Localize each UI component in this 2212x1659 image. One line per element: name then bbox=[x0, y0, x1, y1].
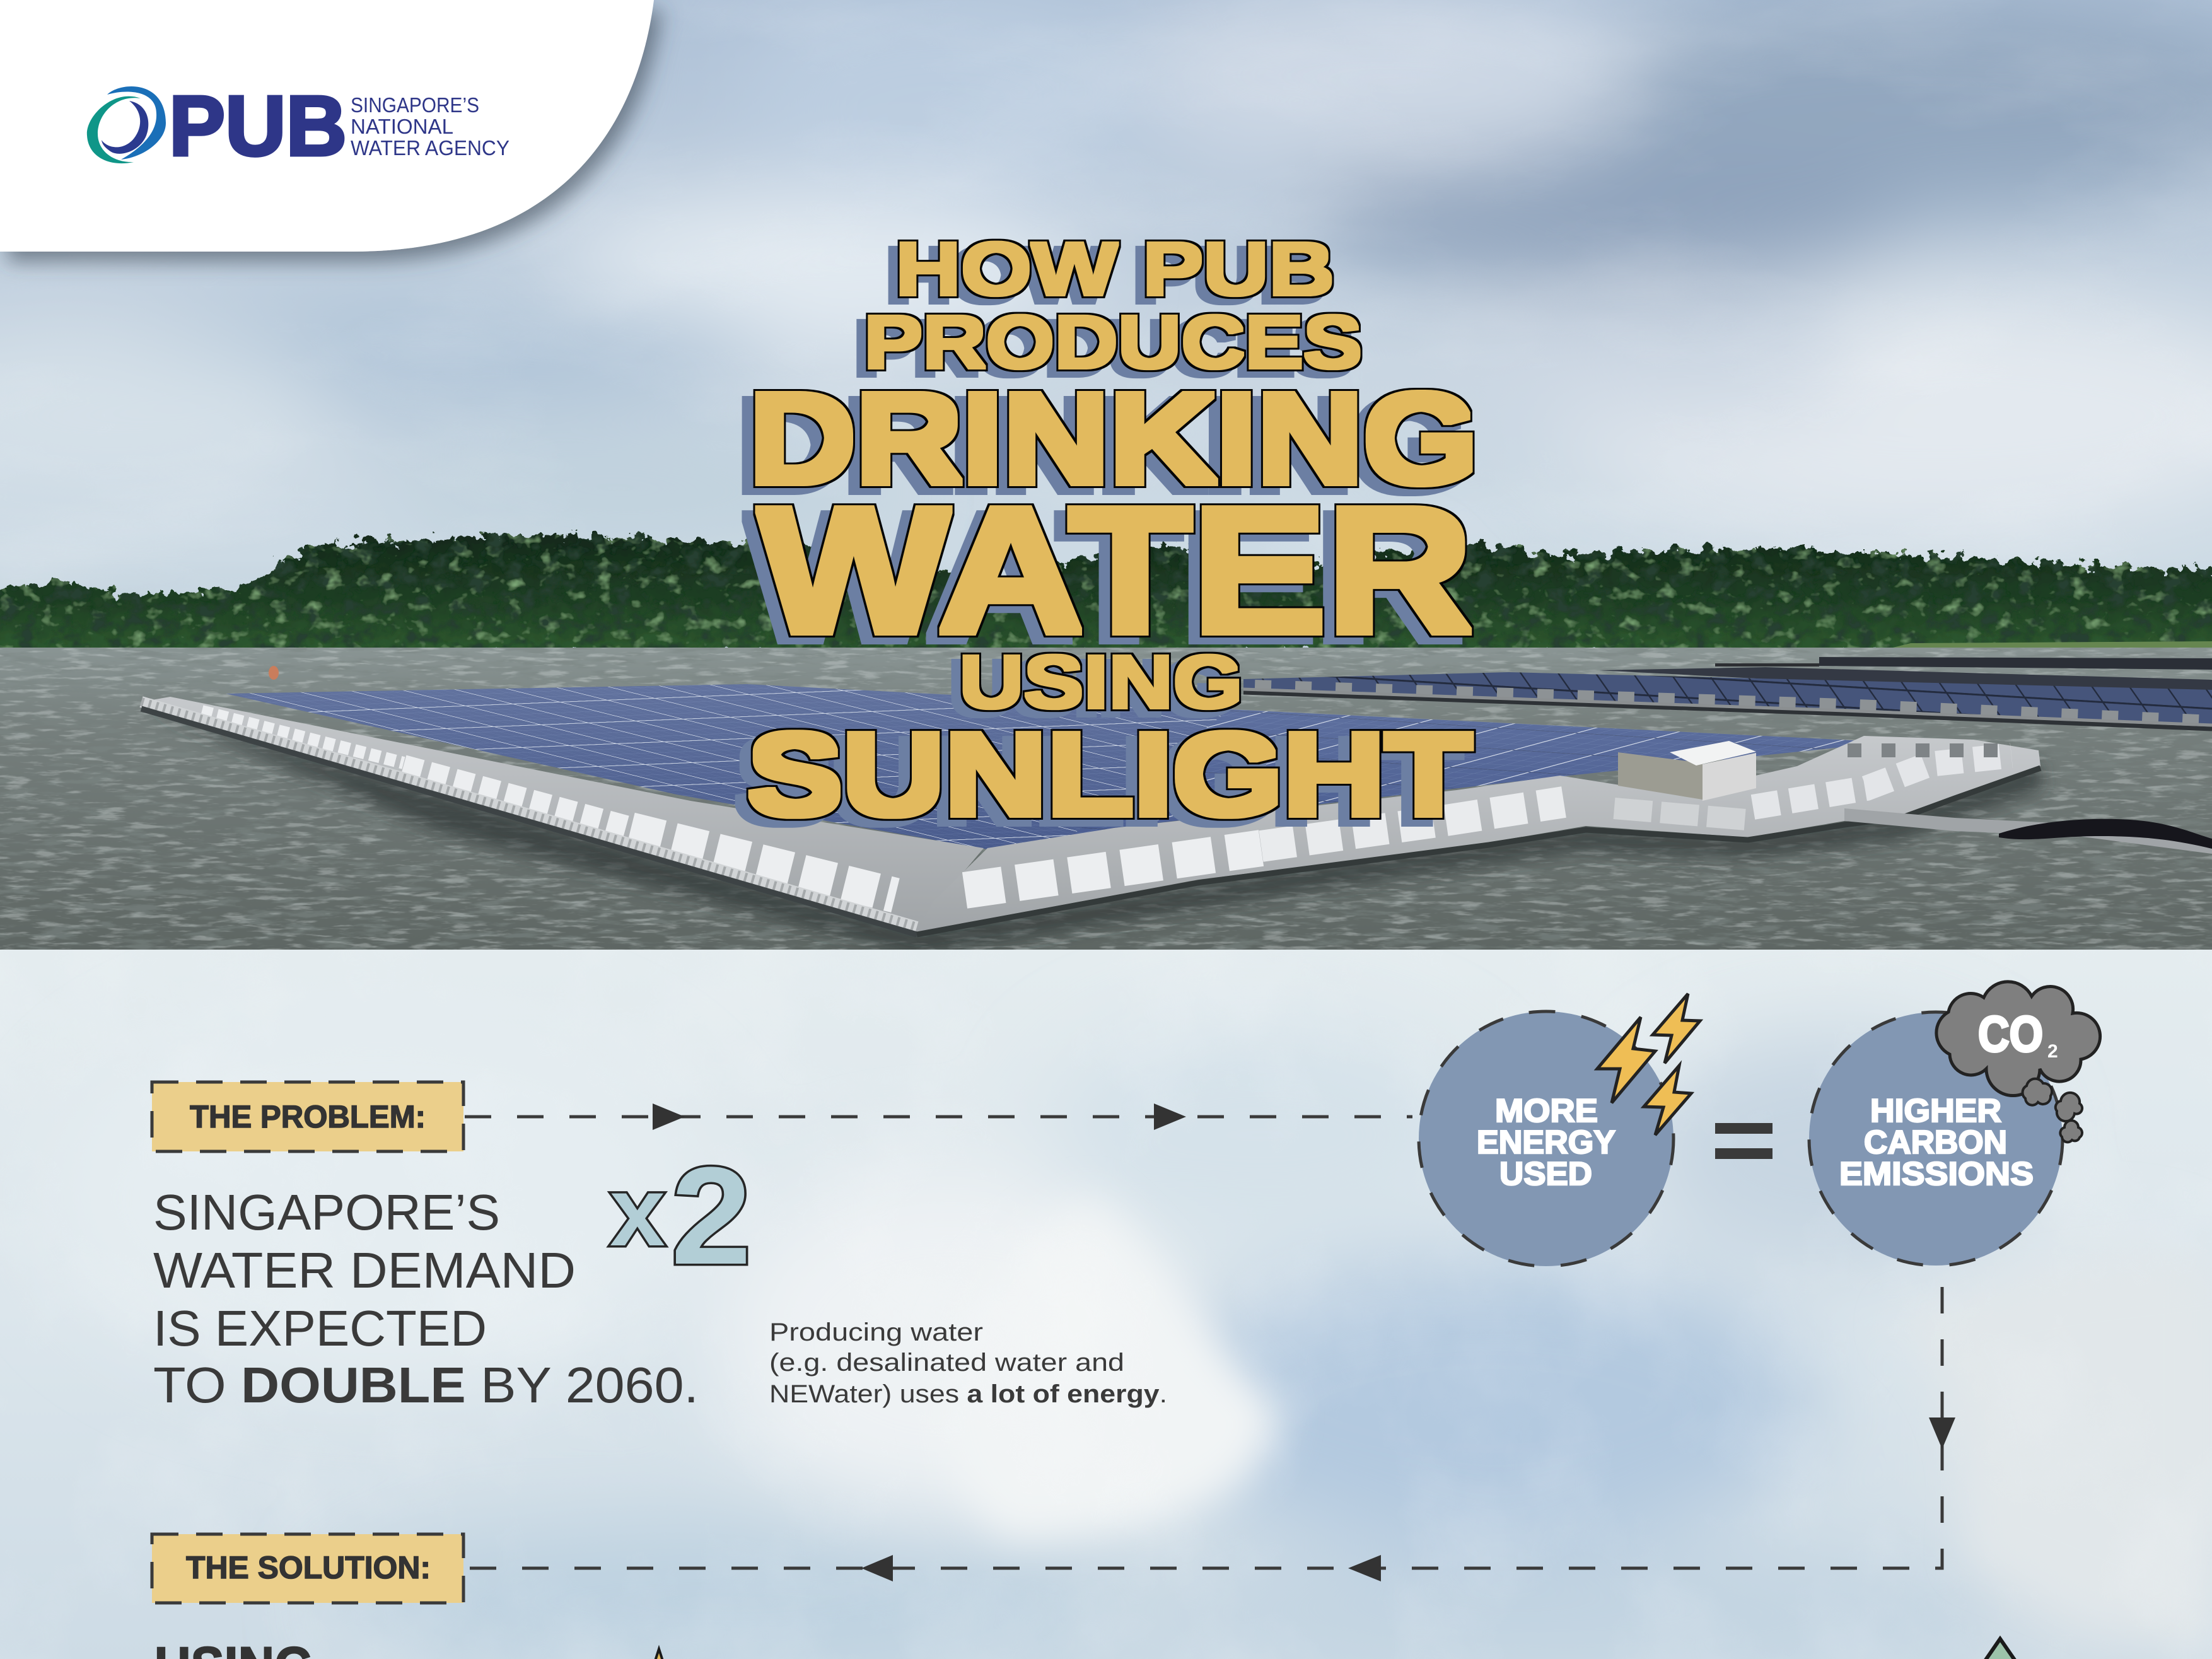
float frame: left edge walkway bbox=[141, 697, 984, 934]
circle: more energy used: USED bbox=[1499, 1156, 1592, 1192]
label: the problem: THE PROBLEM: bbox=[190, 1099, 426, 1134]
logo card bbox=[0, 0, 654, 252]
energy note text: NEWater) uses a lot of energy . bbox=[769, 1380, 1167, 1408]
energy note text: (e.g. desalinated water and bbox=[769, 1349, 1124, 1377]
flow connector: problem to energy circle bbox=[465, 1103, 1412, 1130]
electrical box bbox=[1618, 741, 1756, 801]
title: SUNLIGHT bbox=[748, 709, 1472, 839]
title: PRODUCES bbox=[864, 301, 1362, 384]
label: the solution: THE SOLUTION: bbox=[186, 1550, 431, 1585]
circle: more energy used bbox=[1419, 1011, 1674, 1266]
equals sign bbox=[1715, 1123, 1773, 1159]
title: WATER bbox=[759, 470, 1472, 670]
forested hills bbox=[0, 535, 2212, 656]
arrowhead bbox=[1154, 1103, 1186, 1130]
x2 graphic: x bbox=[610, 1157, 665, 1267]
icon: CO2 cloud bbox=[1936, 982, 2100, 1142]
icon: CO2 cloud: CO bbox=[1978, 1006, 2043, 1062]
problem statement text: IS EXPECTED bbox=[153, 1300, 487, 1356]
icon: green tree tip, cropped bbox=[1974, 1639, 2027, 1659]
energy note text: Producing water bbox=[769, 1318, 983, 1346]
x2 graphic: 2 bbox=[671, 1138, 752, 1293]
arrowhead bbox=[1348, 1555, 1381, 1581]
far solar arrays bbox=[1243, 657, 2212, 729]
energy note text bbox=[769, 1318, 1167, 1408]
agency name bbox=[351, 93, 509, 160]
circle: more energy used: ENERGY bbox=[1477, 1124, 1615, 1161]
water surface bbox=[0, 648, 2212, 950]
buoy bbox=[269, 666, 279, 680]
lower section: cloudy sky background bbox=[0, 950, 2212, 1659]
title bbox=[748, 228, 1478, 839]
agency name: WATER AGENCY bbox=[351, 136, 509, 160]
problem statement text: SINGAPORE’S bbox=[153, 1184, 500, 1240]
icon: CO2 cloud: 2 bbox=[2047, 1041, 2058, 1062]
problem statement text bbox=[153, 1184, 699, 1413]
title: USING bbox=[959, 641, 1243, 724]
sky with clouds bbox=[0, 0, 2212, 656]
arrowhead bbox=[1929, 1417, 1955, 1449]
label: the problem bbox=[152, 1082, 463, 1151]
title: HOW PUB bbox=[895, 228, 1334, 311]
circle: more energy used: MORE bbox=[1495, 1093, 1598, 1129]
icon: lightning bolts bbox=[1597, 994, 1700, 1135]
flow connector: emissions to solution bbox=[465, 1287, 1955, 1581]
agency name: NATIONAL bbox=[351, 115, 453, 138]
water shadow under main array bbox=[141, 706, 2043, 953]
problem statement text: WATER DEMAND bbox=[153, 1242, 576, 1298]
icon: sun ray tip, cropped bbox=[654, 1649, 664, 1659]
hero photo: floating solar farm on reservoir bbox=[0, 0, 2212, 953]
title: DRINKING bbox=[749, 367, 1478, 509]
circle: higher carbon emissions bbox=[1809, 1012, 2063, 1266]
arrowhead bbox=[653, 1103, 685, 1130]
circle: higher carbon emissions: HIGHER bbox=[1870, 1093, 2001, 1129]
main solar panel array bbox=[226, 684, 1890, 849]
cable boom bbox=[1844, 808, 2212, 854]
x2 graphic bbox=[610, 1138, 752, 1293]
problem statement text: TO DOUBLE BY 2060. bbox=[153, 1357, 699, 1413]
PUB logo bbox=[87, 78, 509, 173]
circle: higher carbon emissions: CARBON bbox=[1864, 1124, 2007, 1161]
PUB wordmark: PUB bbox=[169, 78, 347, 173]
shoreline grass strip bbox=[1885, 641, 2212, 649]
label: the solution bbox=[152, 1534, 463, 1603]
circle: higher carbon emissions: EMISSIONS bbox=[1839, 1156, 2034, 1192]
float frame: right edge bbox=[917, 736, 2040, 934]
agency name: SINGAPORE’S bbox=[351, 93, 479, 117]
arrowhead bbox=[861, 1555, 893, 1581]
icon: water swirl bbox=[87, 86, 166, 163]
